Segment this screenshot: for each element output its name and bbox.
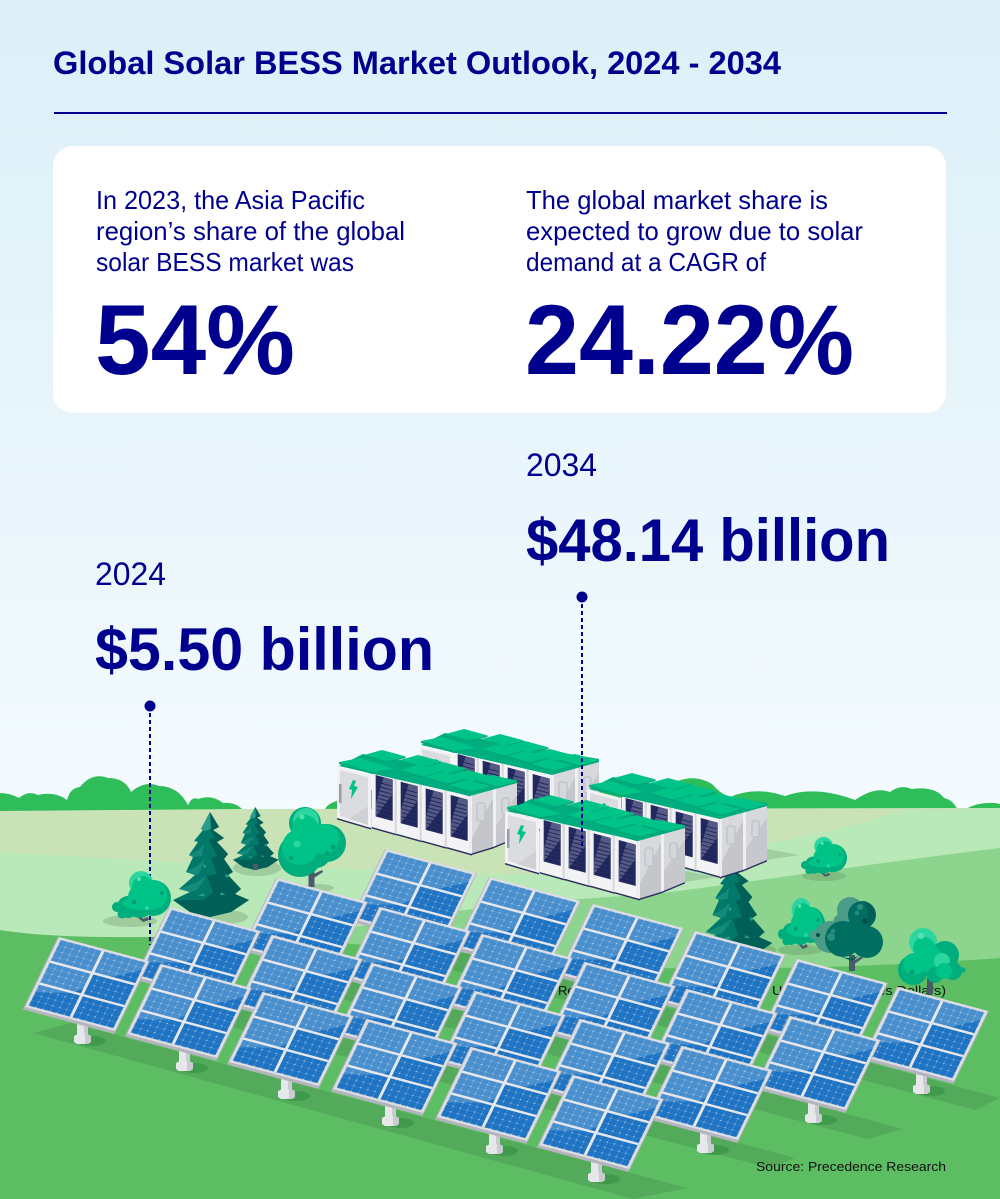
panel row 3 <box>134 907 773 1155</box>
title: Global Solar BESS Market Outlook, 2024 - 2034 <box>53 45 781 81</box>
panel row 2 <box>241 878 881 1125</box>
battery cluster back left <box>419 729 631 834</box>
solar panel array <box>23 849 989 1184</box>
stat: CAGR: 24.22% <box>525 284 854 395</box>
back field <box>0 808 1000 900</box>
right round tree <box>898 928 966 994</box>
trees and shrubs <box>103 807 966 994</box>
front green field <box>0 930 1000 1199</box>
battery cluster front left <box>337 750 549 856</box>
shrub right middle <box>778 898 825 949</box>
dotted leader line: 2024 <box>149 706 151 945</box>
panel row shadows <box>33 935 1000 1199</box>
stat: Asia Pacific share: solar BESS market was <box>96 247 354 277</box>
stat card <box>53 146 946 413</box>
ground shadows <box>103 860 846 956</box>
callout: 2024 value: $5.50 billion <box>95 616 434 683</box>
source note: Source: Precedence Research <box>756 1159 946 1174</box>
dotted leader line: 2034 <box>581 597 583 850</box>
callout: 2034 value <box>526 447 890 602</box>
panel row 4 <box>23 937 664 1184</box>
large pine <box>173 812 249 917</box>
callout: 2024 value: 2024 <box>95 556 166 592</box>
background axis text partly hidden by panels: Unit (United States Dollars) <box>772 983 946 998</box>
battery cluster front right <box>505 795 717 900</box>
stat: CAGR: expected to grow due to solar <box>526 216 863 246</box>
round tree left <box>278 807 346 887</box>
battery cluster back right <box>587 773 799 878</box>
landscape background <box>0 776 1000 1199</box>
panel row 1 <box>350 849 989 1096</box>
callout: 2034 value: 2034 <box>526 447 597 483</box>
background axis text partly hidden by panels: Revenue <box>558 983 610 998</box>
small pine <box>233 807 279 870</box>
callout: 2034 value: $48.14 billion <box>526 507 890 574</box>
background axis text partly hidden by panels <box>558 983 946 998</box>
stat: CAGR: demand at a CAGR of <box>526 247 767 277</box>
stat: CAGR: The global market share is <box>526 185 828 215</box>
stat: Asia Pacific share: In 2023, the Asia Pacific <box>96 185 365 215</box>
sky background <box>0 0 1000 815</box>
title rule <box>54 112 947 114</box>
stat: CAGR <box>525 185 863 395</box>
battery storage units <box>337 729 799 900</box>
dark teal tree <box>810 897 883 971</box>
right pine <box>700 855 772 960</box>
distant hedge <box>0 776 1000 815</box>
stat: Asia Pacific share: 54% <box>95 284 295 395</box>
light green hill <box>0 808 1000 1000</box>
stat: Asia Pacific share: region’s share of the global <box>96 216 405 246</box>
stat: Asia Pacific share <box>95 185 405 395</box>
mid green hill <box>200 848 1000 1000</box>
shrub right upper <box>801 837 847 877</box>
callout: 2024 value <box>95 556 434 712</box>
shrub left <box>112 871 171 922</box>
